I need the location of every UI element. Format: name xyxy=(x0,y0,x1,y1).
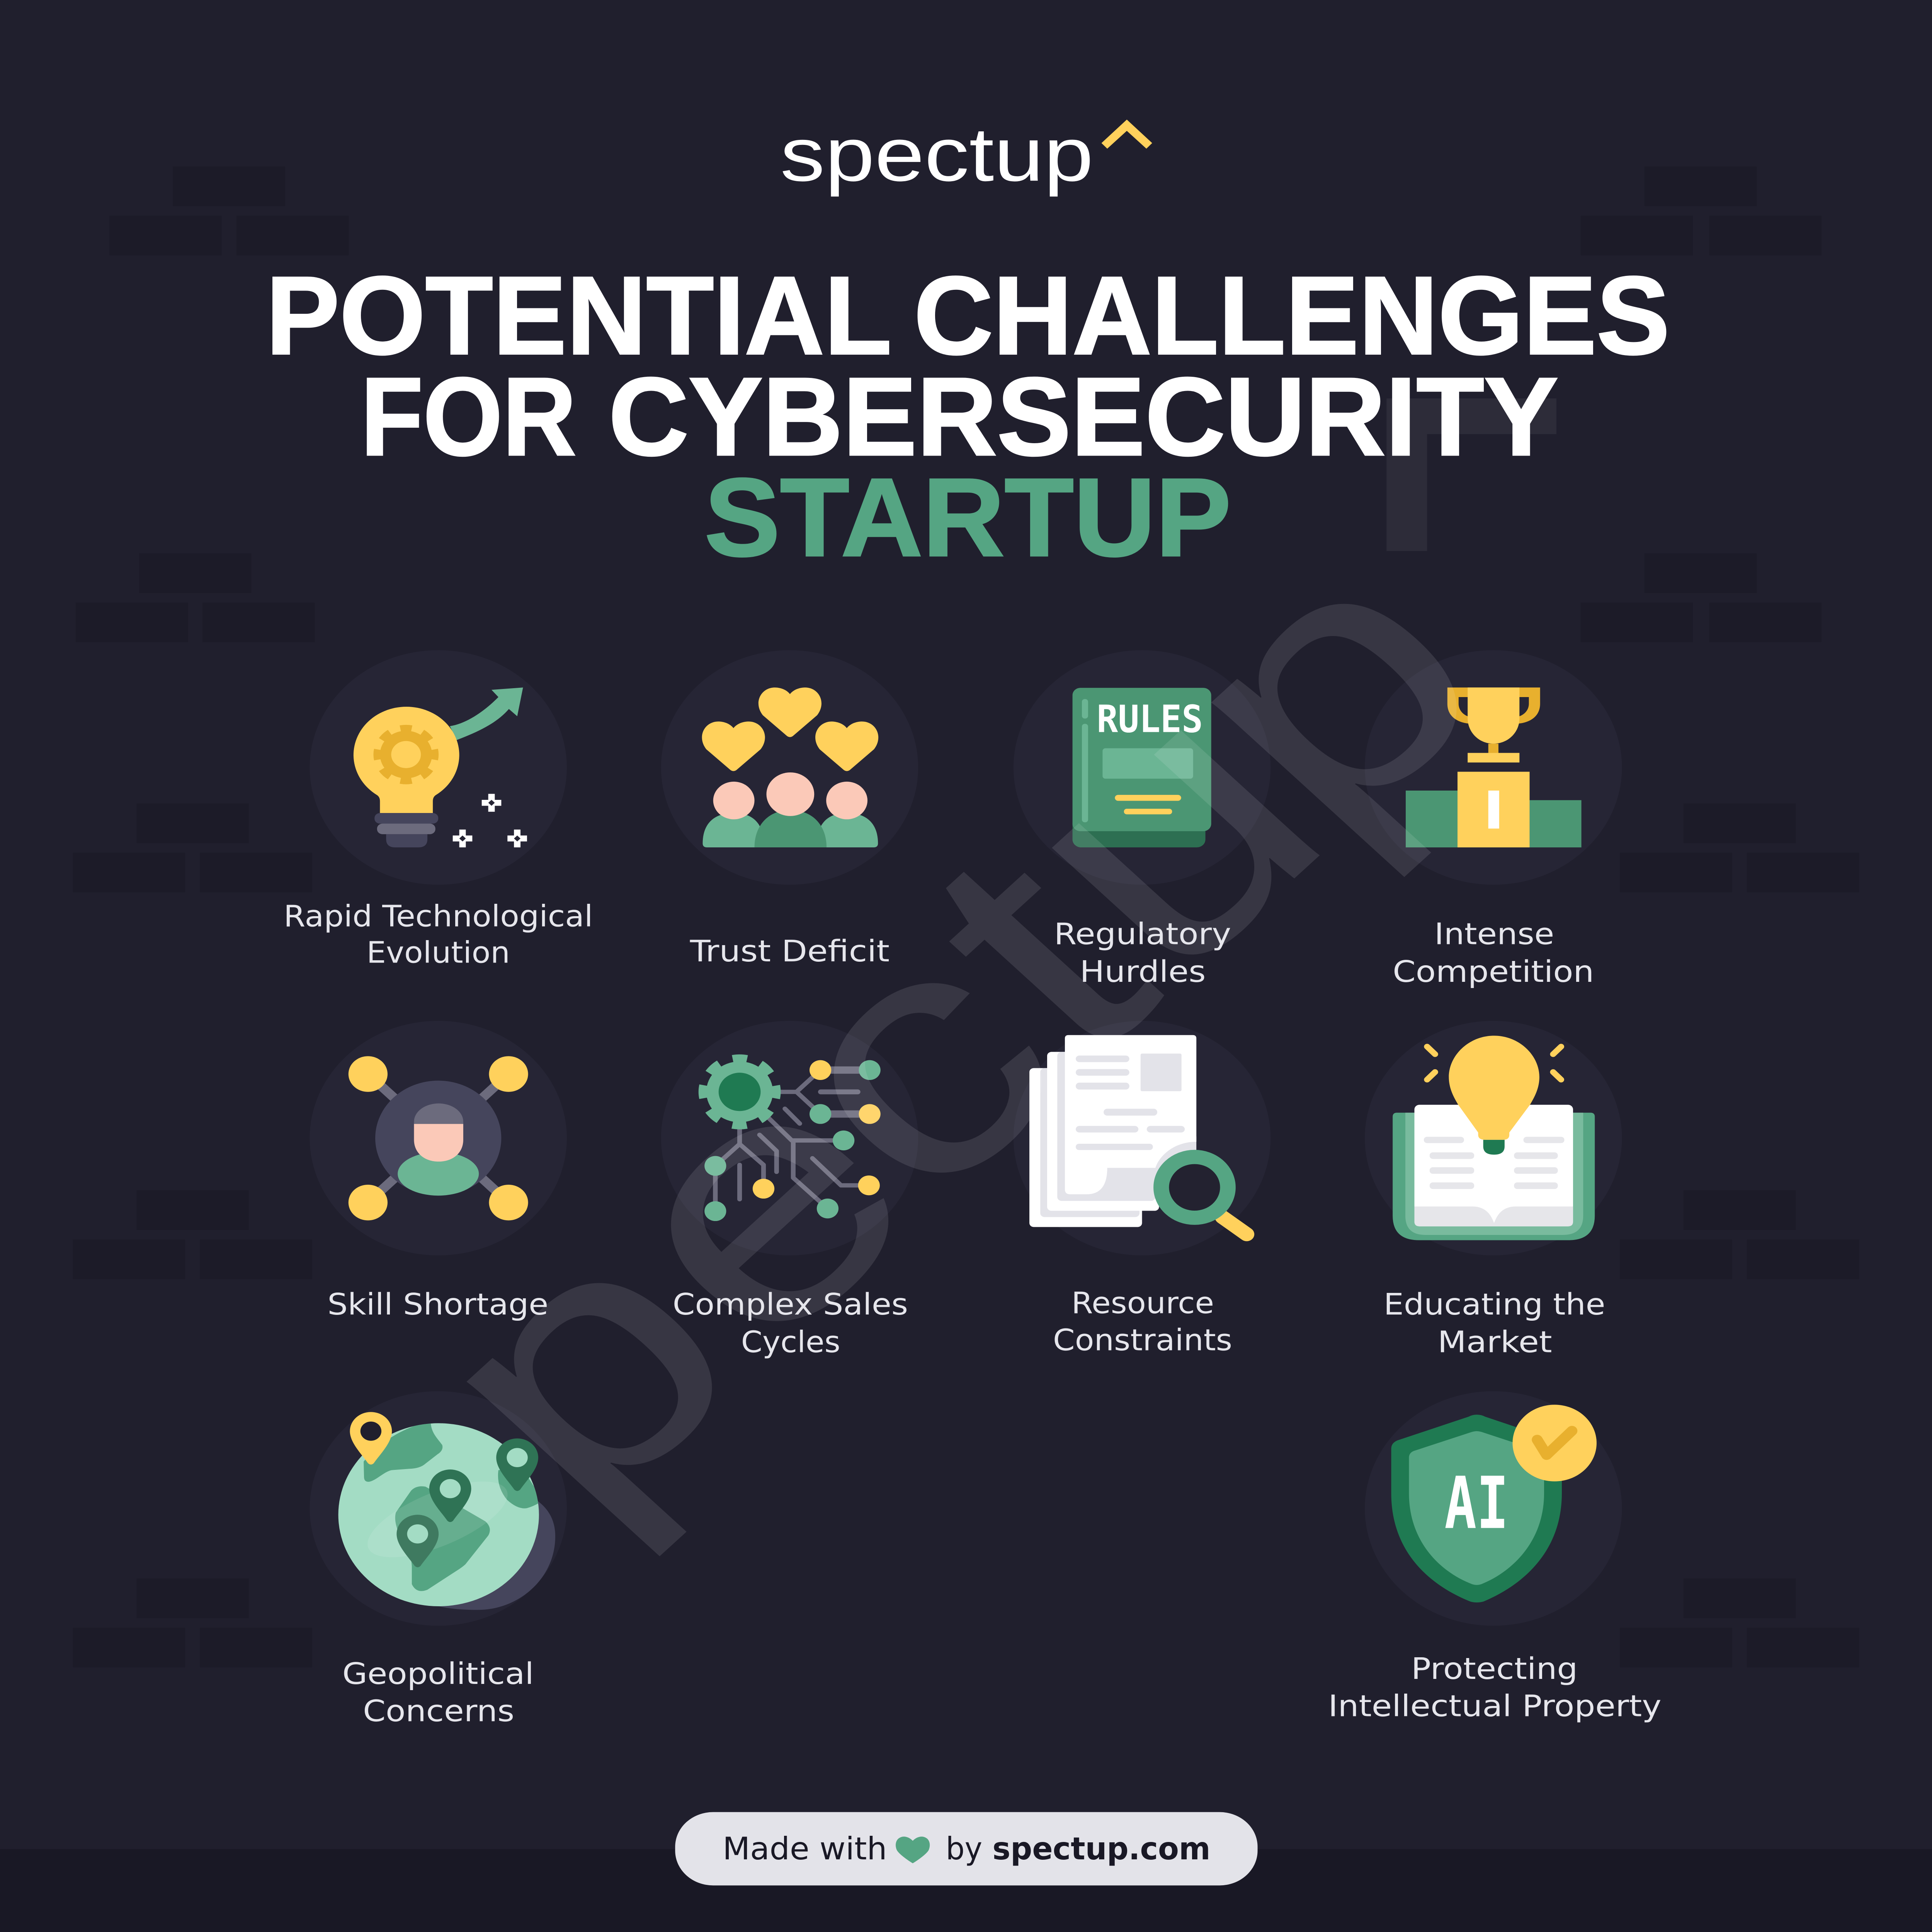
icon: open book with light bulb xyxy=(1393,1036,1595,1240)
icon: documents with magnifier xyxy=(1029,1035,1247,1234)
label: Rapid Technological Evolution: Rapid Technological xyxy=(284,899,593,934)
icon: AI shield with check badge xyxy=(1391,1405,1597,1602)
icon backdrop circles xyxy=(310,650,1622,1626)
title: STARTUP xyxy=(704,455,1231,579)
icon: rules book xyxy=(1073,688,1211,847)
label: Geopolitical Concerns xyxy=(342,1656,534,1729)
label: Protecting Intellectual Property: Intellectual Property xyxy=(1328,1689,1662,1724)
footer pill: made with love by spectup.com: Made with xyxy=(723,1831,887,1867)
label: Intense Competition xyxy=(1393,917,1594,989)
title: CYBERSECURITY xyxy=(609,354,1558,478)
label: Intense Competition: Competition xyxy=(1393,955,1594,989)
label: Intense Competition: Intense xyxy=(1434,917,1554,952)
icon: person with connected nodes xyxy=(349,1056,528,1220)
background brick pattern xyxy=(73,167,1859,1667)
icon: people and hearts xyxy=(702,687,878,847)
icon: rules book: RULES xyxy=(1097,697,1203,741)
label: Complex Sales Cycles xyxy=(673,1287,908,1360)
footer pill: made with love by spectup.com: by xyxy=(946,1831,982,1867)
logo: spectup: spectup xyxy=(780,112,1094,197)
label: Educating the Market: Market xyxy=(1437,1325,1552,1360)
label: Regulatory Hurdles xyxy=(1054,917,1231,989)
label: Resource Constraints xyxy=(1053,1286,1232,1357)
label: Rapid Technological Evolution xyxy=(284,899,593,970)
icon: trophy on podium xyxy=(1406,687,1582,847)
label: Geopolitical Concerns: Concerns xyxy=(363,1694,514,1729)
footer pill: made with love by spectup.com: spectup.com xyxy=(992,1831,1211,1867)
title xyxy=(266,253,1670,579)
title: FOR xyxy=(361,354,576,478)
label: Protecting Intellectual Property xyxy=(1328,1652,1662,1724)
watermark: rotated caret xyxy=(1386,398,1556,551)
label: Trust Deficit: Trust Deficit xyxy=(690,934,889,969)
label: Resource Constraints: Constraints xyxy=(1053,1323,1232,1357)
icon: light bulb with gear and arrow xyxy=(354,687,527,847)
footer pill: made with love by spectup.com xyxy=(675,1812,1258,1885)
label: Regulatory Hurdles: Hurdles xyxy=(1080,955,1206,989)
label: Complex Sales Cycles: Cycles xyxy=(741,1325,840,1360)
label: Educating the Market: Educating the xyxy=(1384,1287,1605,1322)
label: Complex Sales Cycles: Complex Sales xyxy=(673,1287,908,1322)
label: Protecting Intellectual Property: Protecting xyxy=(1411,1652,1578,1686)
footer band xyxy=(0,1849,1932,1932)
label: Geopolitical Concerns: Geopolitical xyxy=(342,1656,534,1691)
icon: globe with location pins xyxy=(338,1412,555,1610)
title: CHALLENGES xyxy=(914,253,1670,378)
title: POTENTIAL xyxy=(266,253,892,378)
icon: AI shield with check badge: AI xyxy=(1444,1461,1509,1545)
watermark: rotated spectup wordmark: pectup xyxy=(349,476,1557,1578)
label: Skill Shortage: Skill Shortage xyxy=(327,1287,548,1322)
label: Educating the Market xyxy=(1384,1287,1605,1360)
icon: gear with circuit network xyxy=(703,1058,881,1221)
label: Rapid Technological Evolution: Evolution xyxy=(367,935,510,970)
label: Resource Constraints: Resource xyxy=(1071,1286,1214,1321)
label: Regulatory Hurdles: Regulatory xyxy=(1054,917,1231,952)
